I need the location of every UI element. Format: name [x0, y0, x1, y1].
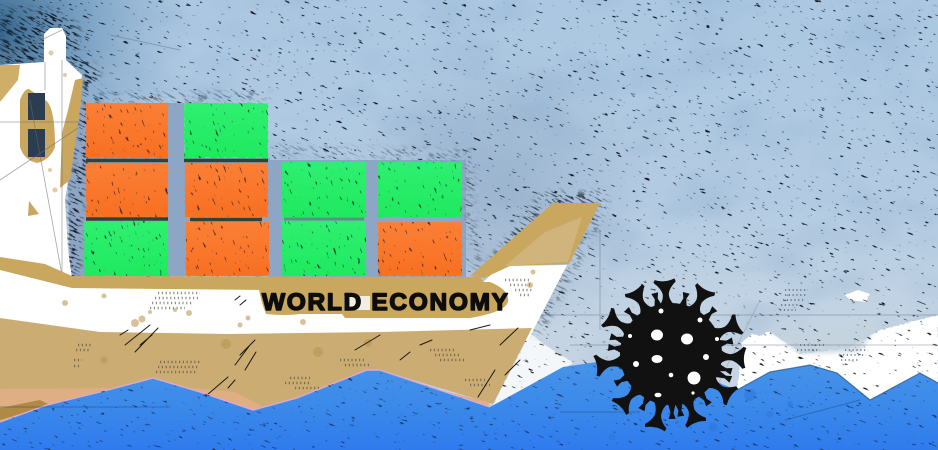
white tower and funnel [0, 28, 82, 280]
tan pill behind the name [258, 282, 508, 318]
icon: coronavirus [593, 278, 746, 432]
tan side strip [60, 78, 83, 188]
large spikes [593, 278, 746, 432]
container stack 4 [378, 162, 462, 276]
bow tan flare [470, 203, 600, 278]
deck band [0, 257, 490, 290]
ship name label: WORLD ECONOMY [262, 289, 508, 316]
container surface specks [84, 103, 462, 276]
sky halftone patches [780, 290, 868, 360]
white hull band [0, 265, 567, 340]
container stack 2 [184, 103, 269, 276]
container stack 1 [84, 103, 168, 276]
hull halftone patches [74, 280, 532, 388]
halo spatter around ship [0, 4, 612, 340]
tan window surround [20, 89, 55, 163]
dark tan waterline streak [0, 400, 50, 420]
white foam behind the waves [493, 290, 938, 405]
white gap in name backing [344, 296, 370, 310]
sea blotches [608, 389, 793, 440]
sea scratch lines [0, 400, 860, 420]
tower window upper [28, 93, 45, 120]
pink wave edge on hull [0, 370, 490, 422]
tan hull lower [0, 318, 532, 422]
container seams [86, 160, 268, 220]
dark wave crest on right [737, 365, 938, 400]
sea [0, 360, 938, 450]
tan small mark [28, 201, 39, 216]
virus body [620, 303, 722, 405]
grey wash softening foam [770, 322, 880, 354]
peach waterline bands [0, 388, 490, 418]
ship superstructure [0, 28, 83, 290]
tower window lower [28, 129, 45, 157]
ship hull [0, 203, 600, 422]
sea specks [0, 360, 938, 450]
hull black hatch strokes [120, 296, 520, 397]
hull stain dots [62, 270, 536, 364]
containers [84, 103, 462, 276]
tower stain dots [48, 50, 67, 192]
bow lighter panel [505, 217, 582, 266]
small spikes [608, 292, 733, 419]
container bay gaps [66, 103, 466, 278]
tan panel upper left [0, 65, 20, 102]
tower scratch lines [0, 30, 80, 290]
seam between green containers [284, 218, 364, 220]
container stack 3 [282, 162, 366, 276]
virus white dots [628, 308, 719, 397]
